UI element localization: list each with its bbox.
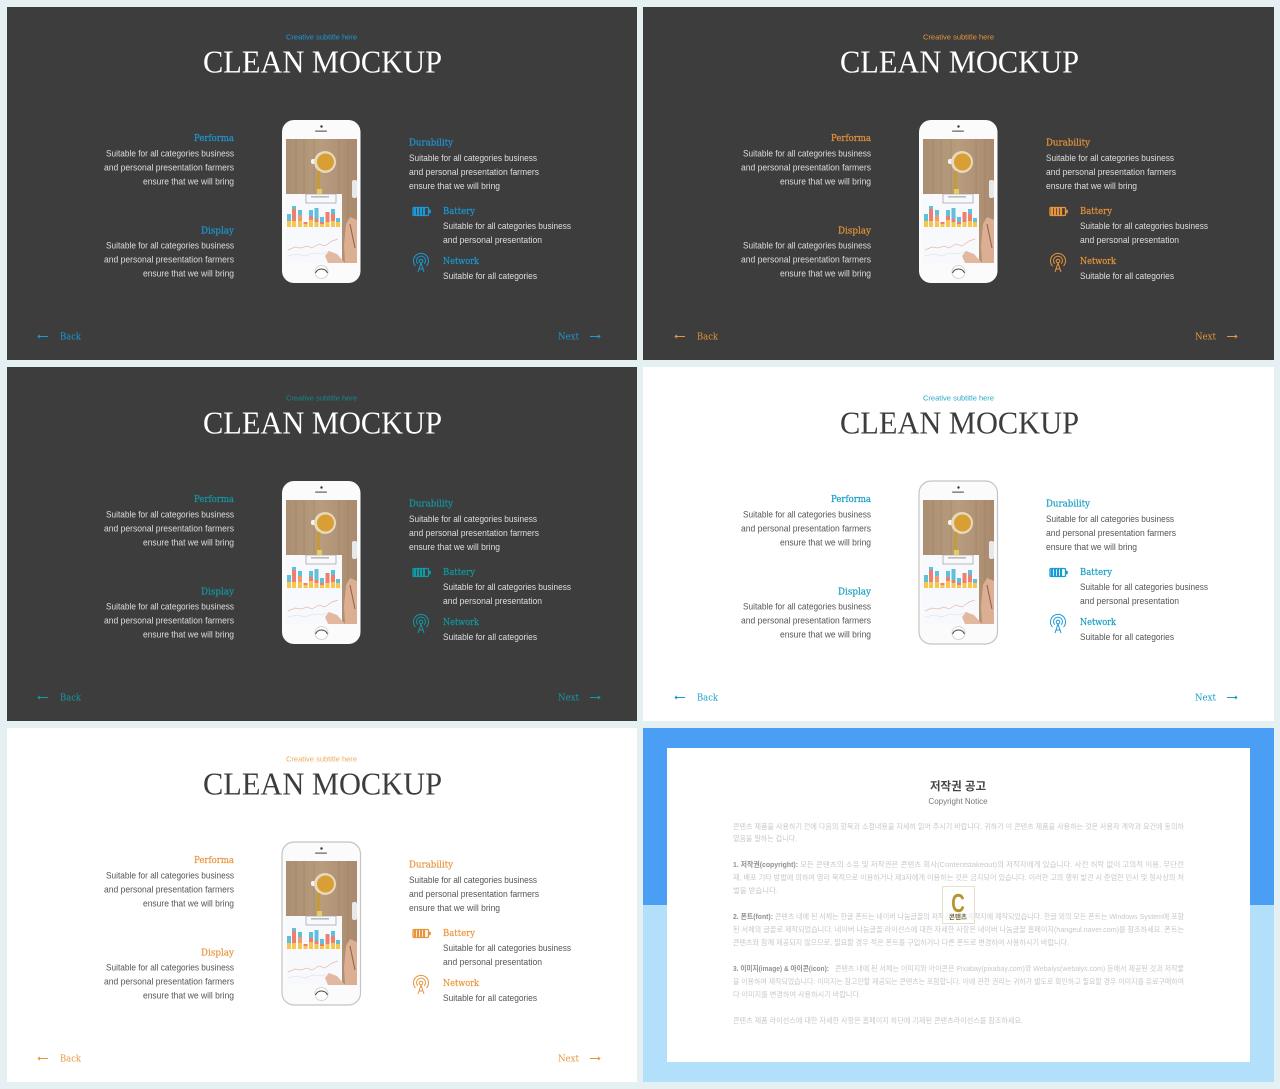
feature: Performa: and personal presentation farmers	[741, 523, 871, 533]
feature: Battery: and personal presentation	[1080, 235, 1179, 245]
phone mockup	[919, 481, 998, 644]
logo: gold C badge: 콘텐츠	[949, 912, 967, 921]
title: CLEAN MOCKUP	[840, 44, 1079, 80]
feature: Battery	[1080, 207, 1208, 245]
panel: copyright notice slide	[643, 728, 1274, 1082]
icon: network tower	[1050, 614, 1066, 633]
feature: Network: Suitable for all categories	[443, 271, 537, 281]
next link	[558, 332, 600, 342]
notice section 2: 2. 폰트(font):	[733, 912, 773, 921]
feature: Network	[1080, 618, 1174, 642]
feature: Battery: Battery	[443, 929, 476, 939]
icon: network tower	[414, 614, 428, 633]
feature: Display: ensure that we will bring	[780, 629, 871, 639]
notice section 1: 모든 콘텐츠의 소유 및 저작권은 콘텐츠 회사(Contentstakeout)의 저작자에게 있습니다. 사전 허락 없이 고의적 이용, 무단전	[800, 860, 1184, 869]
feature: Performa: ensure that we will bring	[143, 898, 234, 908]
notice section 2: 된 서체의 글꼴로 제작되었습니다. 네이버 나눔글꼴 라이선스에 대한 자세한 사항은 네이버 나눔글꼴 홈페이지(hangeul.naver.com)를 참조하세요. 폰트는	[733, 925, 1184, 934]
feature: Performa: Performa	[831, 495, 872, 505]
feature: Display	[741, 226, 872, 278]
back link	[675, 332, 719, 342]
icon: battery	[413, 930, 431, 938]
subtitle: Creative subtitle here	[923, 32, 994, 42]
phone mockup	[919, 120, 998, 283]
feature: Performa: Performa	[194, 134, 235, 144]
feature: Display: and personal presentation farmers	[104, 976, 234, 986]
feature: Performa	[104, 495, 235, 547]
feature: Durability	[1046, 138, 1176, 191]
feature: Battery: Suitable for all categories business	[443, 582, 571, 592]
back link	[38, 694, 82, 704]
feature: Battery: and personal presentation	[443, 235, 542, 245]
notice footer line: 콘텐츠 제품 라이선스에 대한 자세한 사항은 홈페이지 하단에 기재된 콘텐츠라이선스를 참조하세요.	[733, 1016, 1023, 1025]
feature: Durability: and personal presentation farmers	[1046, 167, 1176, 177]
feature: Performa: Suitable for all categories business	[743, 148, 871, 158]
notice intro: 콘텐츠 제품을 사용하기 전에 다음의 항목과 소정내용을 자세히 읽어 주시기 바랍니다. 귀하가 이 콘텐츠 제품을 사용하는 것은 사용자 계약과 요건에 동의하	[733, 822, 1184, 831]
back link: Back	[697, 332, 719, 342]
next link	[1195, 694, 1237, 704]
subtitle: Creative subtitle here	[286, 32, 357, 42]
feature: Network: Suitable for all categories	[443, 993, 537, 1003]
feature: Battery: Battery	[1080, 207, 1113, 217]
feature: Performa	[741, 495, 872, 547]
feature: Performa: Suitable for all categories business	[106, 148, 234, 158]
next link: Next	[558, 1054, 579, 1064]
icon: network tower	[414, 975, 428, 994]
icon: battery	[413, 568, 431, 576]
feature: Durability: Durability	[409, 138, 454, 148]
feature: Battery: and personal presentation	[443, 596, 542, 606]
feature: Display: ensure that we will bring	[780, 268, 871, 278]
feature: Display: Suitable for all categories business	[106, 601, 234, 611]
notice section 3	[733, 964, 1184, 999]
feature: Battery: Battery	[1080, 568, 1113, 578]
notice section 3: 콘텐츠 내에 된 서체는 이미지와 아이콘은 Pixabay(pixabay.com)와 Webalys(webalys.com) 등에서 제공된 것과 저작물	[835, 964, 1184, 973]
feature: Durability: Durability	[1046, 138, 1091, 148]
feature: Durability: ensure that we will bring	[1046, 181, 1137, 191]
back link	[675, 694, 719, 704]
feature: Durability: ensure that we will bring	[1046, 542, 1137, 552]
back link	[38, 332, 82, 342]
feature: Performa	[104, 856, 235, 908]
icon: battery	[1050, 568, 1068, 576]
notice section 2: 콘텐츠와 함께 제공되지 않으므로, 필요할 경우 적은 폰트를 구입하거나 다른 폰트로 변경하여 사용하시기 바랍니다.	[733, 938, 1069, 947]
feature: Durability	[409, 500, 539, 552]
feature: Display: Suitable for all categories business	[743, 601, 871, 611]
feature: Durability: Durability	[409, 860, 454, 870]
feature: Durability: Suitable for all categories business	[409, 514, 537, 524]
feature: Battery: Battery	[443, 568, 476, 578]
feature: Display: Display	[201, 588, 235, 598]
notice intro	[733, 822, 1184, 843]
feature: Durability: Suitable for all categories business	[1046, 514, 1174, 524]
notice heading: 저작권 공고	[930, 779, 986, 793]
icon: battery	[1050, 208, 1068, 216]
feature: Network: Network	[443, 618, 479, 628]
feature: Battery: Suitable for all categories business	[443, 943, 571, 953]
feature: Battery	[443, 929, 571, 967]
icon: network tower	[1050, 253, 1066, 272]
phone mockup	[282, 120, 360, 283]
notice section 3: 3. 이미지(image) & 아이콘(icon):	[733, 964, 829, 973]
feature: Performa: ensure that we will bring	[780, 537, 871, 547]
subtitle: Creative subtitle here	[286, 754, 357, 764]
feature: Network	[443, 979, 537, 1003]
feature: Durability: and personal presentation farmers	[409, 528, 539, 538]
panel: dark slide, teal accent	[7, 367, 637, 721]
subtitle: Creative subtitle here	[286, 394, 357, 402]
notice section 3: 을 이용하여 제작되었습니다. 이미지는 참고만할 제공되는 콘텐츠는 포함합니다. 이에 관한 권리는 귀하가 별도로 확인하고 필요할 경우 이미지를 유료구매하여	[733, 977, 1184, 986]
feature: Network: Suitable for all categories	[443, 632, 537, 642]
feature: Durability: Durability	[1046, 500, 1091, 510]
feature: Display: and personal presentation farmers	[741, 254, 871, 264]
feature: Battery: Suitable for all categories business	[1080, 221, 1208, 231]
feature: Durability: Suitable for all categories business	[1046, 153, 1174, 163]
feature: Display: Suitable for all categories business	[106, 240, 234, 250]
feature: Performa: and personal presentation farmers	[104, 162, 234, 172]
feature: Display: Suitable for all categories business	[743, 240, 871, 250]
feature: Display: and personal presentation farmers	[104, 254, 234, 264]
feature: Durability: ensure that we will bring	[409, 542, 500, 552]
phone mockup	[282, 481, 360, 644]
feature: Durability	[409, 860, 539, 913]
feature: Performa	[741, 134, 872, 186]
next link: Next	[1195, 694, 1216, 704]
feature: Display: Suitable for all categories business	[106, 962, 234, 972]
back link: Back	[697, 694, 719, 704]
feature: Display: ensure that we will bring	[143, 268, 234, 278]
title: CLEAN MOCKUP	[203, 766, 442, 802]
notice intro: 였음을 말하는 겁니다.	[733, 834, 797, 843]
feature: Battery	[443, 568, 571, 606]
back link: Back	[60, 1054, 82, 1064]
feature: Durability	[409, 138, 539, 191]
feature: Durability: and personal presentation farmers	[409, 167, 539, 177]
notice section 3: 다 이미지를 변경하여 사용하시기 바랍니다.	[733, 990, 861, 999]
notice heading: Copyright Notice	[928, 797, 988, 806]
feature: Performa: Performa	[194, 856, 235, 866]
feature: Performa: ensure that we will bring	[143, 176, 234, 186]
feature: Performa: ensure that we will bring	[143, 537, 234, 547]
feature: Durability: Durability	[409, 500, 454, 510]
back link	[38, 1054, 82, 1064]
feature: Display: ensure that we will bring	[143, 990, 234, 1000]
feature: Battery: and personal presentation	[1080, 596, 1179, 606]
feature: Performa	[104, 134, 235, 186]
feature: Display	[741, 588, 872, 639]
next link	[558, 694, 600, 704]
title: CLEAN MOCKUP	[203, 404, 442, 440]
feature: Battery: Battery	[443, 207, 476, 217]
feature: Display: Display	[838, 226, 872, 236]
notice heading	[928, 779, 988, 806]
feature: Display	[104, 226, 235, 278]
next link: Next	[558, 332, 579, 342]
feature: Durability: and personal presentation farmers	[409, 889, 539, 899]
next link	[558, 1054, 600, 1064]
logo: gold C badge	[942, 886, 974, 924]
panel: white slide, orange accent	[7, 728, 637, 1082]
feature: Performa: and personal presentation farmers	[104, 884, 234, 894]
phone mockup	[282, 842, 360, 1005]
feature: Durability: and personal presentation farmers	[1046, 528, 1176, 538]
feature: Battery	[443, 207, 571, 245]
feature: Display	[104, 948, 235, 1000]
subtitle: Creative subtitle here	[923, 394, 994, 402]
feature: Durability	[1046, 500, 1176, 552]
title: CLEAN MOCKUP	[840, 404, 1079, 440]
next link: Next	[1195, 332, 1216, 342]
notice section 1: 벌을 받습니다.	[733, 886, 778, 895]
feature: Display: and personal presentation farmers	[104, 615, 234, 625]
back link: Back	[60, 332, 82, 342]
feature: Display: Display	[838, 588, 872, 598]
icon: battery	[413, 208, 431, 216]
feature: Display: Display	[201, 948, 235, 958]
back link: Back	[60, 694, 82, 704]
panel: dark slide, orange accent	[643, 7, 1274, 360]
title: CLEAN MOCKUP	[203, 44, 442, 80]
notice section 1: 1. 저작권(copyright):	[733, 860, 798, 869]
panel: white slide, blue accent	[643, 367, 1274, 721]
icon: network tower	[414, 253, 428, 272]
feature: Performa: and personal presentation farmers	[104, 523, 234, 533]
next link	[1195, 332, 1237, 342]
feature: Network	[443, 618, 537, 642]
feature: Performa: Performa	[831, 134, 872, 144]
feature: Battery: Suitable for all categories business	[443, 221, 571, 231]
feature: Network: Suitable for all categories	[1080, 271, 1174, 281]
notice section 2	[733, 912, 1184, 947]
feature: Durability: ensure that we will bring	[409, 903, 500, 913]
notice section 1	[733, 860, 1184, 895]
feature: Network: Network	[1080, 257, 1116, 267]
feature: Display: ensure that we will bring	[143, 629, 234, 639]
feature: Network: Network	[443, 257, 479, 267]
feature: Durability: ensure that we will bring	[409, 181, 500, 191]
feature: Durability: Suitable for all categories business	[409, 875, 537, 885]
feature: Display: and personal presentation farmers	[741, 615, 871, 625]
feature: Performa: Suitable for all categories business	[106, 509, 234, 519]
feature: Display	[104, 588, 235, 639]
panel: dark slide, blue accent	[7, 7, 637, 360]
feature: Network: Suitable for all categories	[1080, 632, 1174, 642]
notice section 1: 재, 배포 기타 방법에 의하여 영리 목적으로 이용하거나 제3자에게 이용하는 것은 금지되어 있습니다. 이러한 고의 행위 발견 시 준엄한 민사 및 형사상의 처	[733, 873, 1184, 882]
feature: Battery: and personal presentation	[443, 957, 542, 967]
feature: Network	[1080, 257, 1174, 281]
feature: Performa: Suitable for all categories business	[743, 509, 871, 519]
feature: Performa: Suitable for all categories business	[106, 870, 234, 880]
feature: Performa: and personal presentation farmers	[741, 162, 871, 172]
feature: Battery	[1080, 568, 1208, 606]
feature: Network: Network	[443, 979, 479, 989]
feature: Performa: ensure that we will bring	[780, 176, 871, 186]
feature: Network	[443, 257, 537, 281]
logo: gold C badge: C	[951, 888, 965, 918]
feature: Performa: Performa	[194, 495, 235, 505]
feature: Network: Network	[1080, 618, 1116, 628]
feature: Battery: Suitable for all categories business	[1080, 582, 1208, 592]
notice section 2: 콘텐츠 내에 된 서체는 한글 폰트는 네이버 나눔글꼴의 저작권자 및 제작자에 제작되었습니다. 한글 외의 모든 폰트는 Windows System에 포함	[775, 912, 1184, 921]
feature: Display: Display	[201, 226, 235, 236]
feature: Durability: Suitable for all categories business	[409, 153, 537, 163]
next link: Next	[558, 694, 579, 704]
